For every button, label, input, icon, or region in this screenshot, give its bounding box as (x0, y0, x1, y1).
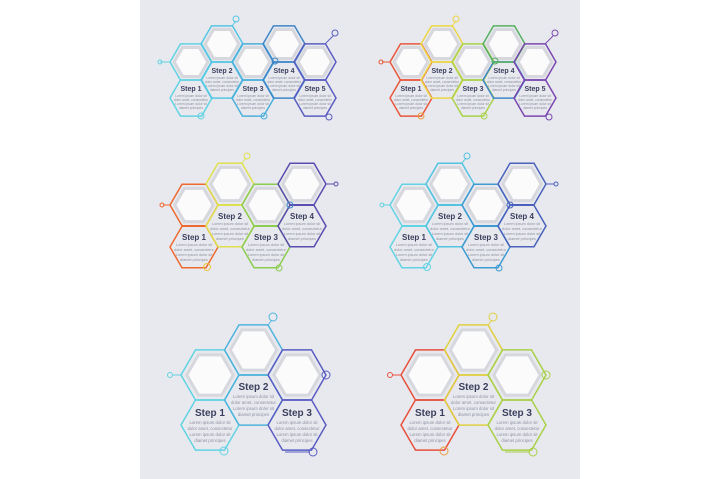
step 1: Lorem ipsum dolor sit (396, 243, 433, 247)
step 3: Step 3 (462, 86, 484, 93)
step 4 (483, 26, 525, 98)
step 2: Lorem ipsum dolor sit (212, 232, 249, 236)
step 2: dolor amet, consectetur (430, 227, 471, 231)
step 1: Lorem ipsum dolor sit (395, 94, 427, 98)
step 4: dolor amet, consectetur (487, 80, 522, 84)
step 1: dolor amet, consectetur (188, 426, 233, 431)
step 5: dolor amet, consectetur (518, 98, 553, 102)
step 2 (421, 16, 463, 98)
step 1: Lorem ipsum dolor sit (396, 253, 433, 257)
step 4: dolor amet, consectetur (502, 227, 543, 231)
step 5: Lorem ipsum dolor sit (519, 94, 551, 98)
step 3: dolor amet, consectetur (275, 426, 320, 431)
step 1 (380, 184, 438, 270)
step 3: dolor amet, consectetur (246, 248, 287, 252)
step 2: dolor amet, consectetur (210, 227, 251, 231)
step 5: Step 5 (524, 86, 546, 93)
step 4: Step 4 (290, 212, 315, 221)
panel: 5 steps blue (158, 16, 338, 120)
step 2: diamet principes (238, 412, 269, 417)
step 3: diamet principes (241, 106, 265, 110)
step 3: Lorem ipsum dolor sit (457, 102, 489, 106)
step 2: dolor amet, consectetur (425, 80, 460, 84)
step 1 (168, 350, 239, 455)
step 1 (158, 44, 212, 119)
step 3: Step 3 (242, 86, 264, 93)
step 3 (242, 184, 290, 271)
step 2: Lorem ipsum dolor sit (453, 394, 495, 399)
step 1: dolor amet, consectetur (408, 426, 453, 431)
step 4: dolor amet, consectetur (267, 80, 302, 84)
step 1: Lorem ipsum dolor sit (176, 253, 213, 257)
step 1: dolor amet, consectetur (174, 248, 215, 252)
step 3: diamet principes (461, 106, 485, 110)
step 2: Lorem ipsum dolor sit (432, 232, 469, 236)
step 2: diamet principes (436, 237, 464, 241)
step 3: Lorem ipsum dolor sit (468, 253, 505, 257)
step 2: Lorem ipsum dolor sit (233, 394, 275, 399)
step 4: Lorem ipsum dolor sit (268, 84, 300, 88)
step 3: dolor amet, consectetur (236, 98, 271, 102)
panel: 3 steps rainbow (388, 313, 550, 456)
step 1: Lorem ipsum dolor sit (175, 94, 207, 98)
step 5 (514, 30, 558, 120)
step 3: Step 3 (282, 408, 312, 419)
step 2: Lorem ipsum dolor sit (432, 222, 469, 226)
step 5: diamet principes (303, 106, 327, 110)
step 3 (462, 184, 510, 271)
step 3: Lorem ipsum dolor sit (248, 253, 285, 257)
step 1: dolor amet, consectetur (394, 248, 435, 252)
step 2 (206, 153, 254, 247)
panel: 3 steps blue (168, 313, 330, 456)
step 4: dolor amet, consectetur (282, 227, 323, 231)
step 4: Step 4 (493, 68, 515, 75)
step 1: dolor amet, consectetur (394, 98, 429, 102)
step 2: Lorem ipsum dolor sit (426, 84, 458, 88)
step 2: diamet principes (216, 237, 244, 241)
step 1: Lorem ipsum dolor sit (176, 243, 213, 247)
step 2: Lorem ipsum dolor sit (233, 406, 275, 411)
step 3: Lorem ipsum dolor sit (496, 420, 538, 425)
step 3: Step 3 (502, 408, 532, 419)
step 2 (201, 16, 243, 98)
step 2: Step 2 (211, 68, 233, 75)
step 3 (452, 44, 494, 119)
step 1: diamet principes (399, 106, 423, 110)
step 5: Lorem ipsum dolor sit (299, 102, 331, 106)
step 3: Lorem ipsum dolor sit (237, 102, 269, 106)
step 3: Step 3 (254, 233, 279, 242)
step 4: diamet principes (492, 88, 516, 92)
step 2 (224, 313, 282, 425)
step 4 (498, 163, 558, 247)
step 3 (232, 44, 274, 119)
step 3: Lorem ipsum dolor sit (457, 94, 489, 98)
step 3 (488, 350, 550, 456)
step 3: Lorem ipsum dolor sit (276, 432, 318, 437)
step 2: Step 2 (438, 212, 463, 221)
step 4: Step 4 (273, 68, 295, 75)
step 3: dolor amet, consectetur (466, 248, 507, 252)
step 3: dolor amet, consectetur (495, 426, 540, 431)
step 2 (444, 313, 502, 425)
panel: 5 steps rainbow (379, 16, 558, 120)
step 4: diamet principes (508, 237, 536, 241)
step 3: Lorem ipsum dolor sit (496, 432, 538, 437)
step 3: Lorem ipsum dolor sit (468, 243, 505, 247)
step 2: diamet principes (458, 412, 489, 417)
step 2: diamet principes (430, 88, 454, 92)
step 2: dolor amet, consectetur (451, 400, 497, 405)
step 2: Step 2 (458, 382, 489, 393)
step 2: Lorem ipsum dolor sit (453, 406, 495, 411)
step 2: dolor amet, consectetur (231, 400, 277, 405)
step 4: Lorem ipsum dolor sit (488, 76, 520, 80)
step 2: dolor amet, consectetur (205, 80, 240, 84)
step 5: Lorem ipsum dolor sit (519, 102, 551, 106)
step 1: Lorem ipsum dolor sit (395, 102, 427, 106)
step 3: Lorem ipsum dolor sit (276, 420, 318, 425)
step 4 (278, 163, 338, 247)
step 4: Lorem ipsum dolor sit (488, 84, 520, 88)
step 4: diamet principes (288, 237, 316, 241)
step 5: diamet principes (523, 106, 547, 110)
step 5 (294, 30, 338, 120)
step 3: Step 3 (474, 233, 499, 242)
step 1: Step 1 (400, 86, 422, 93)
step 5: Step 5 (304, 86, 326, 93)
step 1: Step 1 (415, 408, 445, 419)
step 1: Lorem ipsum dolor sit (189, 432, 231, 437)
step 2: Lorem ipsum dolor sit (206, 84, 238, 88)
step 1: diamet principes (194, 438, 226, 443)
step 3: dolor amet, consectetur (456, 98, 491, 102)
step 1: Lorem ipsum dolor sit (409, 420, 451, 425)
step 4: Lorem ipsum dolor sit (284, 222, 321, 226)
step 1: diamet principes (400, 258, 428, 262)
step 4: Lorem ipsum dolor sit (284, 232, 321, 236)
step 3: Lorem ipsum dolor sit (237, 94, 269, 98)
step 3: diamet principes (252, 258, 280, 262)
step 4: diamet principes (272, 88, 296, 92)
step 3: diamet principes (281, 438, 313, 443)
step 1: dolor amet, consectetur (174, 98, 209, 102)
step 2: Lorem ipsum dolor sit (212, 222, 249, 226)
step 2: Step 2 (238, 382, 269, 393)
step 1 (388, 350, 459, 455)
step 1: diamet principes (179, 106, 203, 110)
step 2 (426, 153, 474, 247)
step 1: Step 1 (180, 86, 202, 93)
step 1 (379, 44, 432, 119)
step 4 (263, 26, 305, 98)
step 1: Lorem ipsum dolor sit (189, 420, 231, 425)
step 1: Lorem ipsum dolor sit (175, 102, 207, 106)
step 2: Step 2 (431, 68, 453, 75)
step 1: Lorem ipsum dolor sit (409, 432, 451, 437)
step 3: diamet principes (472, 258, 500, 262)
step 3 (268, 350, 330, 456)
step 5: dolor amet, consectetur (298, 98, 333, 102)
background panel (140, 0, 580, 479)
step 2: Lorem ipsum dolor sit (206, 76, 238, 80)
step 2: Lorem ipsum dolor sit (426, 76, 458, 80)
step 4: Lorem ipsum dolor sit (268, 76, 300, 80)
step 3: diamet principes (501, 438, 533, 443)
step 3: Lorem ipsum dolor sit (248, 243, 285, 247)
step 1: diamet principes (180, 258, 208, 262)
step 1: Step 1 (402, 233, 427, 242)
step 1: Step 1 (195, 408, 225, 419)
step 4: Lorem ipsum dolor sit (504, 222, 541, 226)
step 4: Step 4 (510, 212, 535, 221)
step 1 (160, 184, 218, 270)
panel: 4 steps rainbow (160, 153, 338, 271)
step 1: Step 1 (182, 233, 207, 242)
step 1: diamet principes (414, 438, 446, 443)
step 2: diamet principes (210, 88, 234, 92)
step 2: Step 2 (218, 212, 243, 221)
panel: 4 steps blue (380, 153, 558, 271)
step 5: Lorem ipsum dolor sit (299, 94, 331, 98)
step 4: Lorem ipsum dolor sit (504, 232, 541, 236)
